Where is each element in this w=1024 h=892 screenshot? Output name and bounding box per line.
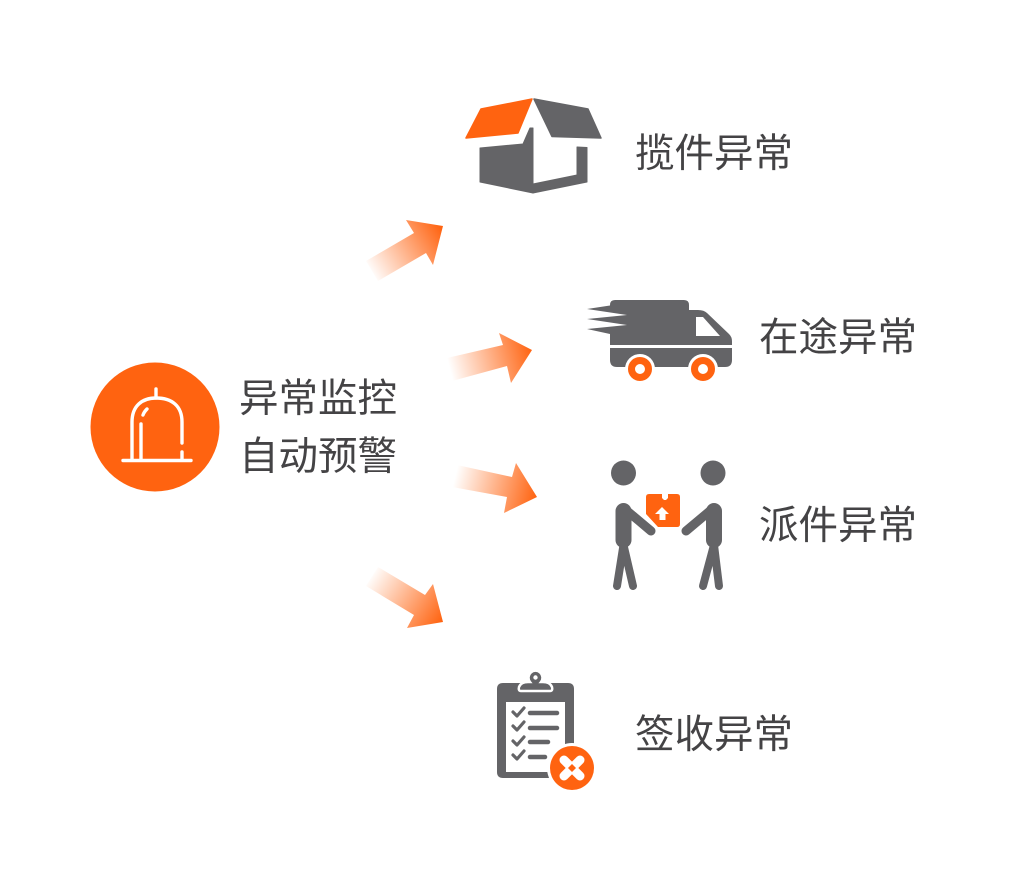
label: in transit: 在途异常 [759,316,917,360]
label: delivery: 派件异常 [759,504,917,548]
heading: central label [239,377,397,479]
label: pickup: 揽件异常 [635,132,793,176]
arrow: to delivery [452,463,537,513]
icon: clipboard with error badge [497,671,597,793]
icon: two people handing a parcel [611,460,726,586]
heading: central label: 自动预警 [239,435,397,479]
arrow: to signing [366,567,443,628]
icon: open box [466,99,601,193]
heading: central label: 异常监控 [239,377,397,421]
label: signing: 签收异常 [635,713,793,757]
icon: alarm bell circle [90,362,220,492]
arrow: to pickup [366,220,443,281]
icon: delivery van [587,300,732,384]
arrow: to transit [447,333,532,383]
